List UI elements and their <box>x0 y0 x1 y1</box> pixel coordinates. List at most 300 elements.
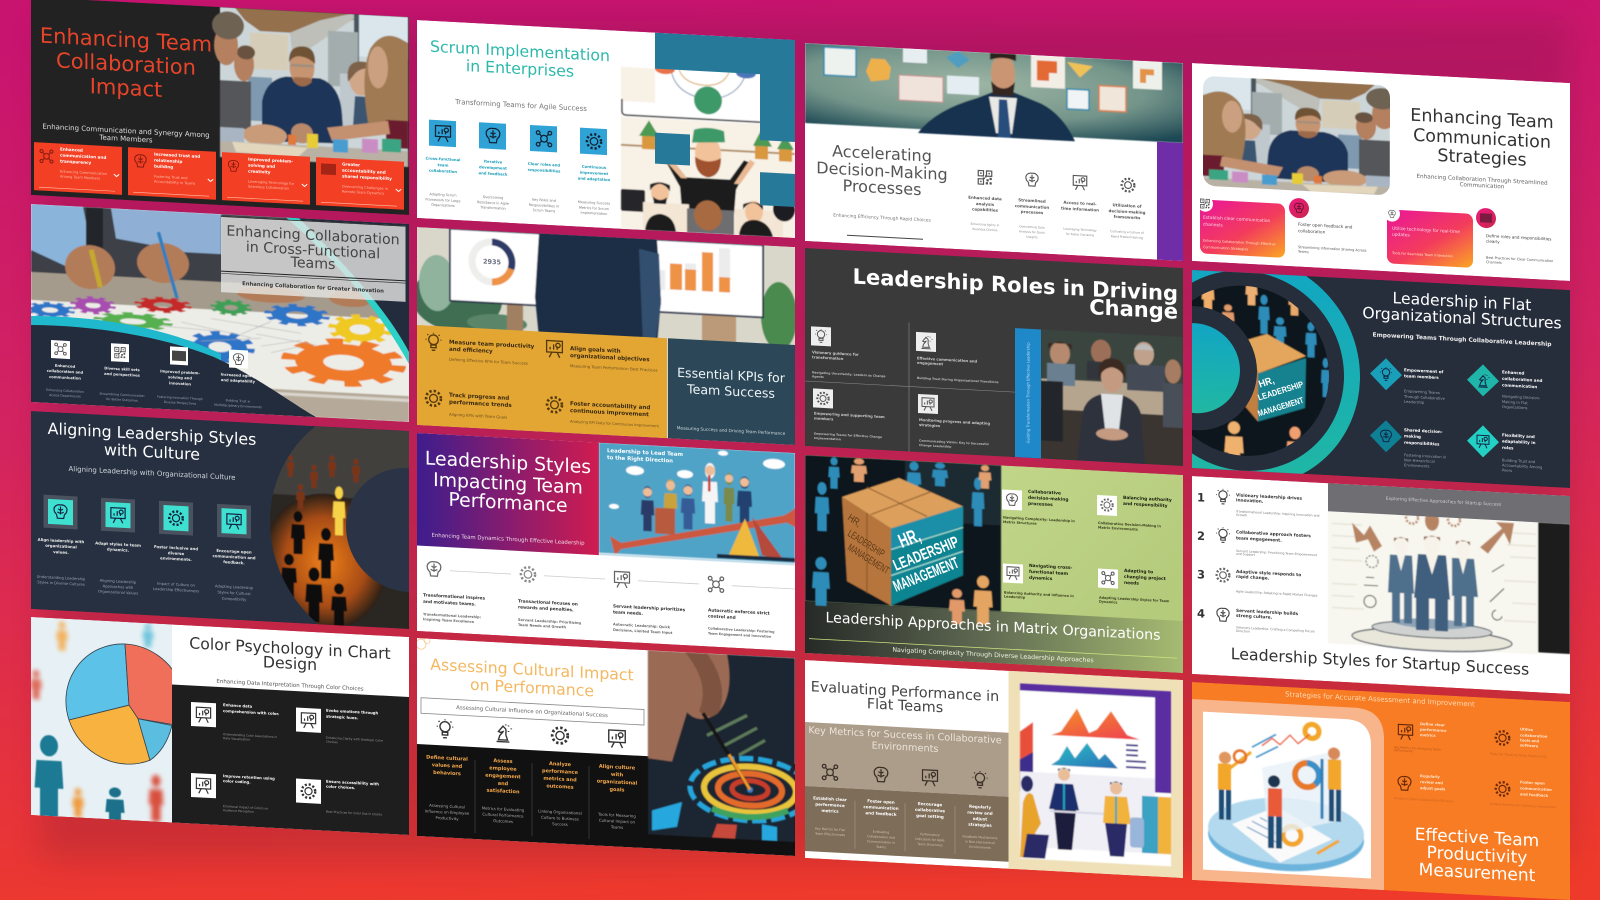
column 4: Collaborative Leadership: Fostering <box>708 626 775 634</box>
column 1: analysis <box>976 201 995 207</box>
item 2: Matrix Environments <box>1098 526 1138 532</box>
column 2: Teams <box>875 845 886 849</box>
column 1 <box>425 119 461 208</box>
column 1: organizational <box>45 543 77 549</box>
item 1: Measure team productivity <box>449 340 535 350</box>
column 2: Assess <box>493 758 513 765</box>
column 1: Cross-functional <box>426 155 460 162</box>
item 2 <box>1489 726 1548 759</box>
column 2 <box>100 343 145 403</box>
item 3: Balancing Authority and Influence in <box>1004 591 1074 598</box>
item 4: Foster accountability and <box>570 401 650 411</box>
column 2: dynamics. <box>107 547 130 553</box>
column 3 <box>613 571 686 636</box>
card 2: Accountability in Teams <box>154 180 195 186</box>
column 2: Streamlining Communication <box>100 392 145 398</box>
icons row <box>437 719 625 748</box>
column 2: engagement <box>485 773 521 781</box>
column 1 <box>46 340 84 399</box>
column 4: and adaptability <box>221 378 256 384</box>
item 2: software <box>1520 743 1539 748</box>
column 4: Feedback Mechanisms <box>963 834 998 840</box>
cube lettering: MANAGEMENT <box>890 553 962 595</box>
item 3: Track progress and <box>449 393 509 402</box>
card 1: Among Team Members <box>60 175 100 181</box>
column 3: Success <box>552 821 568 827</box>
column 4: decision-making <box>1109 208 1146 215</box>
icons row <box>822 763 988 789</box>
subtitle: Transforming Teams for Agile Success <box>454 98 587 113</box>
header caption: Strategies for Accurate Assessment and Improvement <box>1285 690 1475 709</box>
title: Leadership in Flat <box>1393 289 1531 314</box>
column 1: Establish clear <box>813 795 847 802</box>
column 4: organizational <box>597 779 638 787</box>
item 4 <box>1490 779 1557 809</box>
slide: Color Psychology in Chart Design <box>30 617 409 842</box>
card 4: Remote Team Dynamics <box>342 189 384 196</box>
column 1: Inspiring Team Excellence <box>423 617 475 624</box>
subtitle: Enhancing Efficiency Through Rapid Choices <box>833 213 931 224</box>
illustration: team on arrow boat <box>599 443 802 565</box>
column 3: diverse <box>168 550 184 556</box>
metrics heading: Key Metrics for Success in Collaborative <box>808 725 1002 746</box>
column 1: Styles in Diverse Cultures <box>37 580 85 587</box>
item 3 <box>1394 773 1454 803</box>
column 2: Evaluating <box>873 830 889 834</box>
subtitle: Communication <box>1460 182 1505 191</box>
cube side lettering: MANAGEMENT <box>846 541 892 577</box>
item 2: Foster open feedback and <box>1298 222 1353 230</box>
illustration: scrum master <box>621 61 795 238</box>
item 1 card <box>1197 195 1285 258</box>
item 2 <box>296 706 384 747</box>
column 3: Scrum Teams <box>533 208 556 213</box>
column 1: Transformational inspires <box>423 592 485 602</box>
timeline connector <box>450 571 795 589</box>
column 2: processes <box>1021 209 1044 215</box>
item 2: 2 <box>1197 529 1205 543</box>
item 1 card: Establish clear communication <box>1203 215 1271 224</box>
illustration: three leaders on pedestal <box>1328 505 1570 658</box>
illustration: analytics meeting <box>1020 683 1171 866</box>
item 3: members <box>814 416 834 422</box>
column 3: environments. <box>160 555 192 562</box>
title: in Cross-Functional <box>246 239 380 263</box>
item 3: Fostering Innovation in <box>1404 453 1447 460</box>
item 2: team engagement. <box>1236 535 1282 544</box>
photo: crowd with glowing figure <box>263 423 411 634</box>
column 2: Analysis for Quick <box>1019 229 1045 235</box>
card 2 <box>128 147 216 200</box>
item 2: Effective communication and <box>917 356 978 364</box>
title: Leadership Roles in Driving <box>853 264 1178 306</box>
column 2: development <box>479 164 507 171</box>
item 1: Empowerment of <box>1404 367 1444 374</box>
column 1: Enhanced data <box>968 195 1002 201</box>
column 3: team needs. <box>613 609 643 617</box>
item 2: strategic hues. <box>326 714 359 720</box>
cube lettering <box>890 523 962 599</box>
column 2: Collaboration and <box>867 834 895 840</box>
column 4: Metrics for Scrum <box>579 206 610 211</box>
column 3: for Faster Decisions <box>1066 232 1095 237</box>
item 3 card: Tools for Seamless Team Interaction <box>1391 251 1453 258</box>
item 4: communication <box>1520 786 1552 792</box>
column 2: communication <box>863 804 899 811</box>
item 1 card: channels <box>1203 222 1223 229</box>
column 3: solving and <box>168 375 192 381</box>
item 2: Choices <box>326 740 338 744</box>
column 2: Resistance in Agile <box>477 200 509 206</box>
column 3: Culture to Business <box>541 815 579 822</box>
column 4: strategies <box>968 822 992 828</box>
column 4 <box>578 128 611 216</box>
column 1: Transformational Leadership: <box>423 612 482 619</box>
column 2: for Better Outcomes <box>106 397 138 403</box>
item 3: responsibilities <box>1404 440 1440 447</box>
column 4: Environments <box>969 845 991 850</box>
column 3 <box>157 346 203 406</box>
item 2: Collaborative approach fosters <box>1236 529 1311 539</box>
title: Flat Teams <box>867 696 943 716</box>
column 1: Across Departments <box>49 393 81 399</box>
column 4: adjust <box>973 816 987 822</box>
item 3: Emotional Impact of Colors on <box>223 804 268 811</box>
item 4: Adapting to <box>1124 568 1153 575</box>
item 2: collaboration <box>1520 733 1548 739</box>
column 2: and feedback <box>479 170 508 177</box>
subtitle: Empowering Teams Through Collaborative Leadership <box>1373 333 1551 348</box>
subtitle: Enhancing Team Dynamics Through Effective Leadership <box>431 533 585 547</box>
title: in Enterprises <box>466 56 574 81</box>
item 2: and responsibility <box>1123 501 1168 509</box>
divider <box>809 638 1177 659</box>
slide: Effective Team Productivity Measurement <box>1192 682 1570 900</box>
item 2: collaboration and <box>1502 376 1542 383</box>
slide: Leadership Approaches in Matrix Organizations <box>805 455 1183 673</box>
item 2 <box>1289 198 1367 257</box>
item 2: tools and <box>1520 738 1540 743</box>
column 3: performance <box>542 768 579 776</box>
item 2: Evoke emotions through <box>326 708 379 715</box>
title: Color Psychology in Chart <box>189 633 391 663</box>
column 1: Enhancing Collaboration <box>46 388 84 394</box>
teal frame blocks <box>655 33 795 207</box>
item 1: Data Visualization <box>223 736 250 742</box>
photo: man at KPI dashboards <box>412 227 797 351</box>
item 3 card: Utilize technology for real-time <box>1392 226 1460 235</box>
title: Measurement <box>1419 860 1536 886</box>
item 1: metrics <box>1420 733 1436 738</box>
column 2: Metrics for Evaluating <box>482 805 525 813</box>
column 4: review and <box>967 810 993 816</box>
column 4: Autocratic enforces strict <box>708 607 770 617</box>
column 1: values. <box>53 549 69 555</box>
column 1: Enhancing Agility in <box>971 222 999 227</box>
column 1: Productivity <box>435 815 459 821</box>
item 2: and Support <box>1236 552 1256 557</box>
title: Productivity <box>1427 843 1527 868</box>
column 2: and <box>498 781 509 787</box>
column 4: and adaptation <box>578 176 611 182</box>
item 1: team members <box>1404 373 1439 380</box>
item 3: Non-Hierarchical <box>1404 458 1435 464</box>
card 1: communication and <box>60 153 106 160</box>
navy title panel <box>668 338 795 445</box>
item 3: Navigating cross- <box>1029 563 1072 571</box>
column 1: Adapting Scrum <box>429 192 457 198</box>
item 4: Adapting Leadership Styles for Team <box>1099 596 1170 603</box>
item 4: clearly <box>1486 239 1500 244</box>
item 2: collaboration <box>1298 228 1326 235</box>
item 1: processes <box>1028 501 1053 508</box>
slide: Essential KPIs for Team Success <box>412 227 797 445</box>
column 2 <box>477 122 509 211</box>
purple block <box>1157 142 1183 261</box>
slide: Assessing Cultural Impact on Performance <box>416 637 810 857</box>
item 1 <box>1197 488 1319 521</box>
column 2: Iterative <box>484 159 503 165</box>
subtitle: Measuring Success and Driving Team Performance <box>677 425 786 437</box>
item 4: Guiding Principles for Continuous Improvement <box>1490 802 1557 809</box>
column 3: Encourage <box>918 801 942 807</box>
item 2: Tools for Tracking Team Productivity <box>1489 752 1547 759</box>
title: Design <box>263 652 317 674</box>
column 1 <box>37 494 86 587</box>
slide: Enhancing Team Communication Strategies <box>1192 63 1570 281</box>
item 2: Enhanced <box>1502 369 1524 376</box>
item 4: strong culture. <box>1236 613 1273 621</box>
item 4: Servant leadership builds <box>1236 608 1299 617</box>
item 1: Visionary leadership drives <box>1236 492 1302 502</box>
column 3: Decisions, Limited Team Input <box>613 628 673 635</box>
item 1 card: Enhancing Collaboration Through Effective <box>1203 239 1275 246</box>
column 4: goals <box>609 787 625 793</box>
title: Leadership Approaches in Matrix Organizations <box>825 610 1161 644</box>
column 2: Approaches with <box>103 584 134 590</box>
item 1: Navigating Complexity: Leadership in <box>1003 515 1075 523</box>
column 2: rewards and penalties. <box>518 604 574 613</box>
item 1 <box>426 332 535 366</box>
column 2: Servant Leadership: Prioritizing <box>518 618 581 625</box>
item 3: 3 <box>1197 567 1205 582</box>
column 3 <box>538 760 582 828</box>
slide: Leadership in Flat Organizational Structures <box>1128 249 1570 504</box>
card 1: Enhanced <box>60 147 83 153</box>
item 1: Defining Effective KPIs for Team Success <box>449 357 528 366</box>
column 4 <box>597 764 638 831</box>
column 4 <box>1109 178 1146 240</box>
vertical caption: Guiding Transformation Through Effective Leadership <box>1026 342 1030 444</box>
item 1: Empowering Teams <box>1404 389 1440 395</box>
item 3 <box>1197 567 1318 598</box>
metrics panel <box>805 722 1008 797</box>
card 4: accountability and <box>342 167 386 175</box>
item 4: Ensure accessibility with <box>326 779 379 786</box>
column 3: Leadership Effectiveness <box>153 587 199 593</box>
inner dark disc <box>346 465 470 595</box>
white image panel <box>1203 712 1371 878</box>
column 2: Communication in <box>867 839 895 845</box>
subtitle: Enhancing Collaboration for Greater Innovation <box>242 281 384 295</box>
illustration: analytics team on platform <box>1208 719 1364 875</box>
navy corner wedge <box>293 218 409 356</box>
item 4: roles <box>1502 445 1514 451</box>
title: Organizational Structures <box>1362 304 1562 333</box>
column 1: Define cultural <box>426 754 468 763</box>
card 3: Improved problem- <box>248 157 293 164</box>
decorative rings <box>416 637 430 650</box>
column 3: goal setting <box>916 813 944 819</box>
item 3: Empowering Teams for Effective Change <box>814 431 882 439</box>
item 1: Key Metrics for Analyzing Team <box>1394 745 1441 752</box>
column 2: communication <box>1015 203 1049 210</box>
item 4: Dynamics <box>1099 600 1117 605</box>
grid <box>805 317 1015 457</box>
column 1: collaboration and <box>47 369 84 375</box>
subtitle box <box>421 698 644 725</box>
column 2: Foster open <box>867 798 895 805</box>
item 2: Streamlining Information Sharing Across <box>1298 245 1367 253</box>
item 4: needs <box>1124 580 1139 587</box>
item 3: color coding. <box>223 778 251 785</box>
cube side lettering <box>846 512 892 577</box>
column 4: feedback. <box>223 559 245 565</box>
item 4: Change Leadership <box>919 443 952 449</box>
title: Enhancing Collaboration <box>226 223 400 249</box>
column dividers <box>475 760 589 839</box>
peach panel <box>1192 699 1384 890</box>
column 4: Team Engagement and Innovation <box>708 631 772 639</box>
title: Collaboration <box>56 47 196 80</box>
left teal disc <box>1150 321 1240 416</box>
column 2: and feedback <box>865 810 897 817</box>
title: Evaluating Performance in <box>811 679 999 705</box>
card 2: Increased trust and <box>154 152 200 159</box>
item 4 <box>918 394 991 451</box>
item 4 <box>547 397 660 428</box>
column 2: Outcomes <box>493 818 513 824</box>
underline <box>847 235 923 240</box>
left dark disc <box>1133 303 1257 433</box>
title: Accelerating <box>832 141 932 166</box>
item 2: Collaborative Decision-Making in <box>1098 521 1161 528</box>
photo: hands and gears <box>29 204 409 422</box>
column 4: improvement <box>580 170 608 176</box>
column 4: Building Trust in <box>226 398 250 404</box>
slide: Enhancing Team Collaboration Impact <box>31 0 409 215</box>
column 3: Indicators for Agile <box>915 837 945 842</box>
column 1: capabilities <box>972 206 999 213</box>
item 1: Enhance data <box>223 702 252 709</box>
cube lettering: LEADERSHIP <box>890 533 961 574</box>
black content panel <box>172 684 409 835</box>
column 1: Enhanced <box>55 364 75 369</box>
column 3: Autocratic Leadership: Quick <box>613 622 671 629</box>
cube side lettering: HR, <box>846 512 863 529</box>
column 3 <box>1061 175 1099 238</box>
title: Decision-Making <box>816 158 948 184</box>
slide: Scrum Implementation in Enterprises <box>417 20 795 238</box>
item 4: Analyzing KPI Data for Continuous Improvement <box>570 420 660 428</box>
item 2: Enhancing Clarity with Strategic Color <box>326 736 384 743</box>
column 1: behaviors <box>433 770 461 777</box>
column 3: Clear roles and <box>528 161 560 168</box>
title: Impact <box>90 73 162 102</box>
column 1: collaboration <box>429 168 457 174</box>
card 1: Enhancing Communication <box>60 170 107 176</box>
photo: HR cube and figures <box>1152 268 1352 478</box>
item 3 <box>191 771 275 815</box>
item 3: making <box>1404 433 1421 439</box>
card 4: Overcoming Challenges in <box>342 184 388 191</box>
title: Performance <box>448 490 568 517</box>
item 4: Direction <box>1236 629 1250 634</box>
column 2 <box>95 497 141 596</box>
column 2: Adapt styles to team <box>95 540 141 548</box>
column 1: Organizations <box>431 203 455 208</box>
column 3 <box>528 125 561 214</box>
item 4 <box>1098 567 1170 607</box>
column 1: Align leadership with <box>38 537 85 544</box>
column 4: Regularly <box>969 804 991 810</box>
item 1 <box>1370 357 1446 406</box>
column 1: Key Metrics for Flat <box>815 827 846 832</box>
column 4: with <box>611 772 624 778</box>
item 4: 4 <box>1197 606 1205 621</box>
column 1: values and <box>432 762 463 770</box>
card 2: Fostering Trust and <box>154 175 188 180</box>
item 1 <box>1394 721 1447 755</box>
column 4: Increased agility <box>221 373 256 378</box>
item 3: Adaptive style responds to <box>1236 569 1301 578</box>
cube side lettering: LEADERSHIP <box>846 527 887 559</box>
item 3: performance trends <box>449 400 512 409</box>
item 4: Building Trust and <box>1502 458 1535 464</box>
column 1: Assessing Cultural <box>429 803 465 810</box>
item 2: engagement <box>917 361 943 366</box>
subtitle: Enhancing Collaboration Through Streamlined <box>1416 174 1548 187</box>
item 3: review and <box>1420 780 1443 785</box>
item 4: Accountability Among <box>1502 463 1542 470</box>
title: Strategies <box>1437 146 1527 171</box>
item 3: dynamics <box>1029 575 1053 582</box>
item 1: Define clear <box>1420 722 1445 727</box>
column 4: Compatibility <box>222 597 247 602</box>
gradient title panel <box>417 433 599 555</box>
column 4: Styles for Cultural <box>217 590 251 596</box>
column 2: Transformation <box>479 205 506 211</box>
column 3: metrics and <box>543 776 577 783</box>
item 4: Foster open <box>1520 780 1545 786</box>
caption: Exploring Effective Approaches for Startup Success <box>1386 496 1502 508</box>
column 2: Aligning Leadership <box>100 579 137 585</box>
column 4: Utilization of <box>1112 202 1142 209</box>
column 3: outcomes <box>546 783 574 791</box>
item 3: Agile Leadership: Adapting to Rapid Market Changes <box>1236 589 1318 598</box>
column 4: Multidisciplinary Environments <box>214 403 262 409</box>
item 3: Empowering and supporting team <box>814 411 885 419</box>
item 4 <box>1476 208 1553 268</box>
item 1: and efficiency <box>449 347 493 355</box>
title: Change <box>1089 294 1178 324</box>
item 2 <box>547 340 658 373</box>
photo: hand and target dial <box>648 650 810 843</box>
column 3: Fostering Innovation Through <box>157 395 203 401</box>
item 3: Shared decision- <box>1404 427 1443 434</box>
navy swoosh with teal edge <box>31 315 221 364</box>
item 1: decision-making <box>1028 495 1069 503</box>
